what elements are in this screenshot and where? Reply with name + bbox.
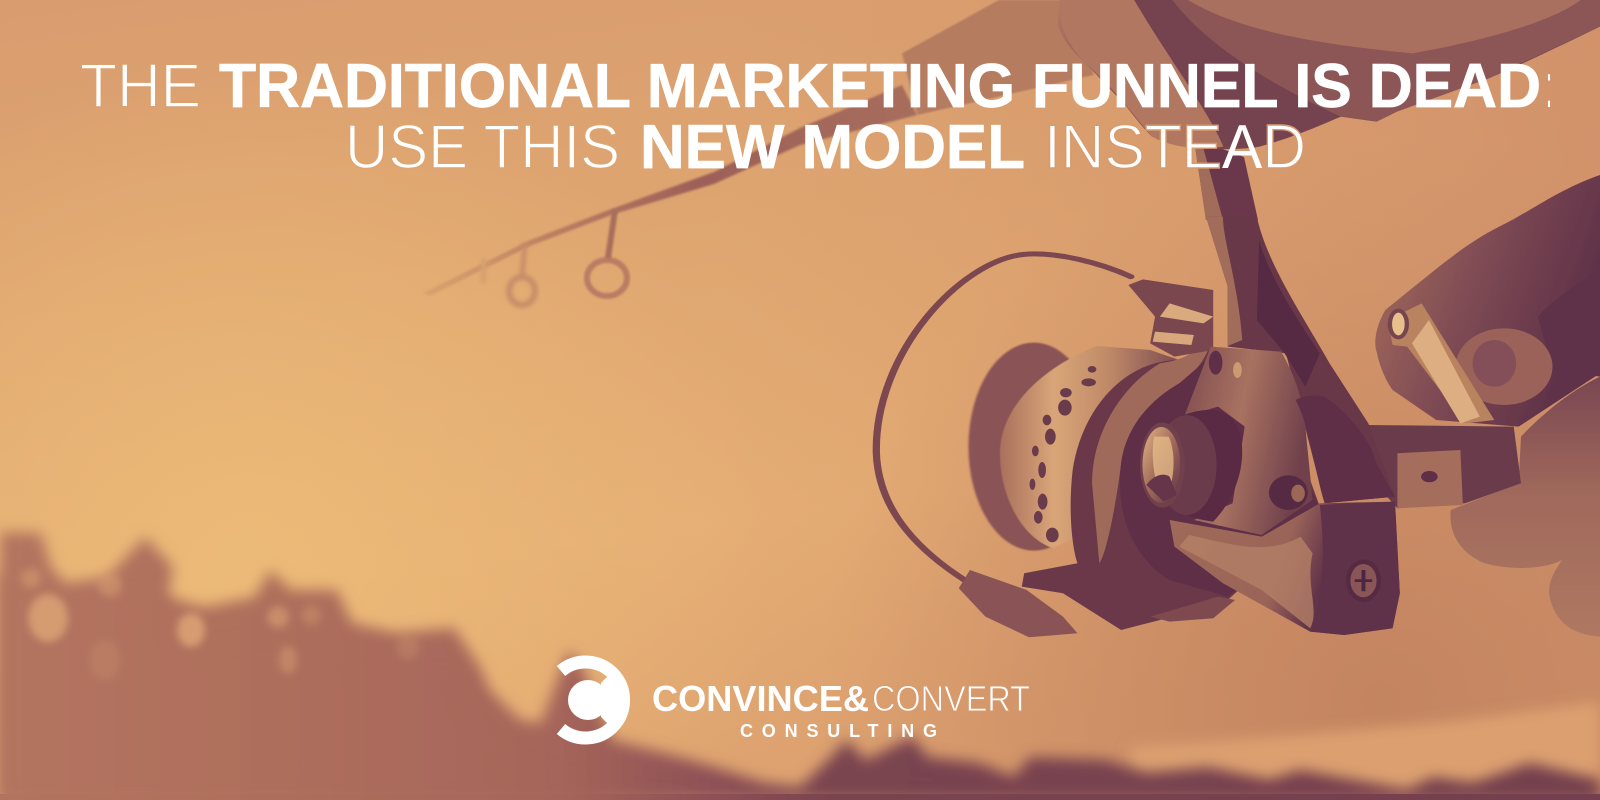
fishing rod with guide rings	[423, 85, 917, 305]
right hand holding the reel	[1368, 175, 1600, 637]
hero banner illustration: :	[1546, 52, 1552, 121]
title	[80, 52, 1552, 182]
spinning reel	[876, 217, 1400, 637]
lower rotor foot	[1150, 597, 1235, 622]
handle arm	[1388, 303, 1494, 423]
title line 2: INSTEAD	[1044, 113, 1306, 182]
drag knob	[1140, 410, 1242, 522]
top hand gripping the rod	[902, 0, 1600, 149]
handle shaft	[1368, 425, 1521, 508]
title line 2: NEW MODEL	[640, 113, 1025, 182]
bail arm bottom	[959, 570, 1078, 637]
rod grip	[902, 0, 1093, 115]
spool	[968, 343, 1179, 551]
body plate	[1184, 347, 1313, 535]
logo: Convince & Convert Consulting: CONVERT	[872, 678, 1030, 719]
screw hole	[1269, 475, 1308, 510]
upper bail arm	[1128, 279, 1213, 357]
logo: Convince & Convert Consulting	[561, 662, 1030, 741]
main body stem	[1206, 217, 1395, 503]
logo mark	[561, 662, 624, 738]
title line 2: USE THIS	[345, 113, 620, 182]
title line 2	[345, 113, 1306, 182]
guide ring small	[483, 243, 535, 305]
foot of reel	[1170, 502, 1400, 635]
logo wordmark: CONVINCE&	[652, 678, 869, 719]
rotor	[1022, 350, 1325, 630]
blurred tree line	[0, 532, 1600, 800]
bail wire	[876, 254, 1131, 582]
reel stem reaching the top hand	[1190, 113, 1258, 220]
logo tagline: CONSULTING	[740, 721, 937, 741]
foot screw	[1346, 559, 1381, 602]
side lever	[1296, 396, 1395, 503]
bokeh spots in the trees	[21, 568, 420, 680]
title line 1: TRADITIONAL MARKETING FUNNEL IS DEAD	[219, 52, 1541, 121]
guide ring large	[587, 210, 627, 296]
title line 1: THE	[80, 52, 201, 121]
